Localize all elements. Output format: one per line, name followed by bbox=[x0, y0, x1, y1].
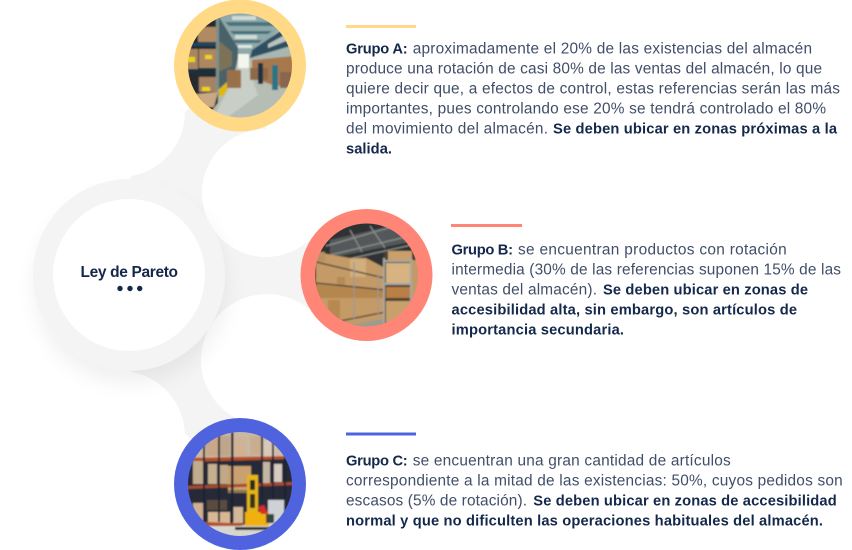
text block: Grupo A: Grupo A: bbox=[346, 42, 408, 58]
text block: Grupo C: Grupo C: bbox=[346, 454, 408, 470]
text block: Grupo A: Se deben ubicar en zonas próximas a la bbox=[553, 122, 838, 138]
text block: Grupo A: produce una rotación de casi 80% de las ventas del almacén, lo que bbox=[346, 60, 822, 78]
text block: Grupo B: ventas del almacén). bbox=[452, 282, 597, 298]
text block: Grupo A: quiere decir que, a efectos de control, estas referencias serán las más bbox=[346, 80, 840, 98]
text block: Grupo C: correspondiente a la mitad de las existencias: 50%, cuyos pedidos son bbox=[346, 472, 843, 490]
text block: Grupo A: aproximadamente el 20% de las existencias del almacén bbox=[413, 40, 812, 58]
three dots bbox=[117, 286, 142, 291]
text block: Grupo C: Se deben ubicar en zonas de accesibilidad bbox=[533, 494, 837, 510]
text block: Grupo B bbox=[451, 224, 841, 338]
text block: Grupo B: Se deben ubicar en zonas de bbox=[603, 282, 808, 298]
central node: Ley de Pareto bbox=[33, 179, 227, 383]
blue photo node: pallet racking and forklift bbox=[174, 418, 306, 550]
text block: Grupo C: se encuentran una gran cantidad de artículos bbox=[413, 452, 731, 470]
text block: Grupo C: escasos (5% de rotación). bbox=[346, 492, 527, 510]
text block: Grupo B: se encuentran productos con rotación bbox=[518, 242, 787, 258]
accent rule C bbox=[346, 432, 416, 436]
salmon photo node: cardboard box shelving bbox=[300, 209, 432, 341]
text block: Grupo A bbox=[346, 25, 840, 158]
yellow photo node: warehouse aisle bbox=[174, 0, 306, 132]
text block: Grupo B: importancia secundaria. bbox=[452, 322, 624, 338]
central title: Ley de Pareto bbox=[80, 264, 178, 281]
text block: Grupo B: Grupo B: bbox=[452, 242, 513, 258]
connector shape bbox=[55, 47, 366, 501]
text block: Grupo B: accesibilidad alta, sin embargo, son artículos de bbox=[452, 302, 797, 318]
text block: Grupo C: normal y que no dificulten las operaciones habituales del almacén. bbox=[346, 514, 823, 530]
text block: Grupo A: salida. bbox=[346, 142, 392, 158]
accent rule A bbox=[346, 25, 416, 28]
text block: Grupo B: intermedia (30% de las referencias suponen 15% de las bbox=[452, 262, 841, 278]
accent rule B bbox=[451, 224, 522, 227]
text block: Grupo A: importantes, pues controlando ese 20% se tendrá controlado el 80% bbox=[346, 100, 826, 118]
text block: Grupo C bbox=[346, 432, 843, 530]
text block: Grupo A: del movimiento del almacén. bbox=[346, 120, 548, 138]
